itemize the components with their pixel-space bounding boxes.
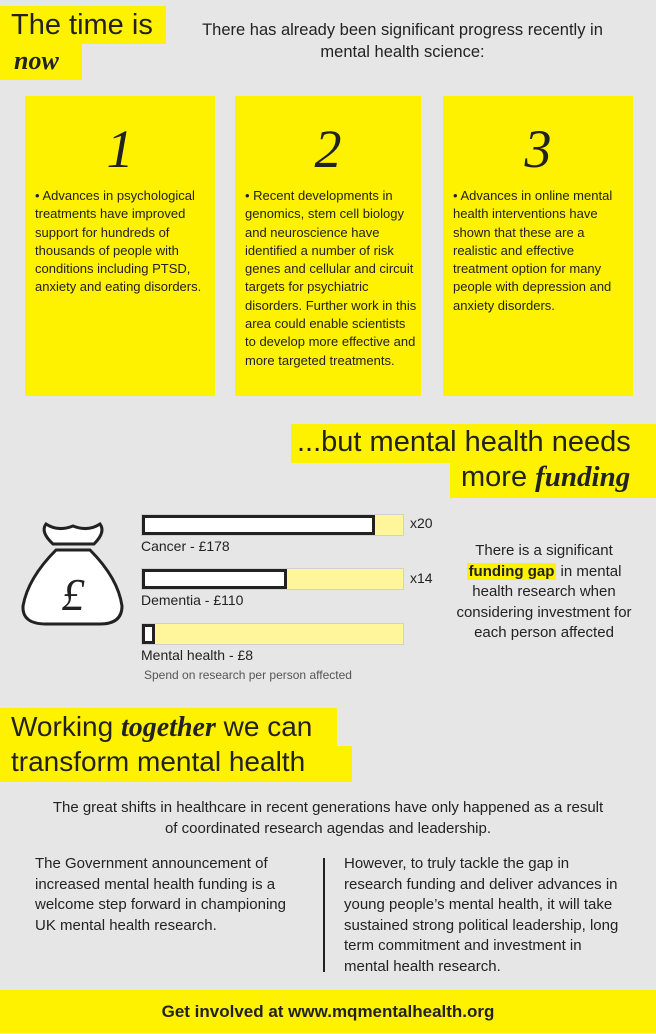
- heading: needs more funding: ...but mental health needs: [297, 426, 631, 458]
- text: left column: The Government announcement of increased mental health funding is a welcome step forward in championing UK mental health research.: [35, 855, 286, 934]
- heading: working together: transform mental health: [11, 746, 305, 777]
- bar chart: Spend on research per person affected: [144, 668, 352, 682]
- panel: 2: [235, 96, 421, 396]
- panel: 2: • Recent developments in genomics, stem cell biology and neuroscience have identified a number of risk genes and cellular and circuit targets for psychiatric disorders. Further work in this area could enable scientists to develop more effective and more targeted treatments.: [245, 188, 416, 368]
- bar chart: x14: [410, 570, 433, 586]
- panel: 3: 3: [524, 119, 552, 179]
- panel: 3: • Advances in online mental health interventions have shown that these are a realistic and effective treatment option for many people with depression and anxiety disorders.: [453, 188, 612, 313]
- text: right column: However, to truly tackle the gap in research funding and deliver advances in young people’s mental health, it will take sustained strong political leadership, long term commitment and investment in mental health research.: [344, 855, 618, 975]
- panel: 2: 2: [314, 119, 342, 179]
- bar chart: Dementia - £110: [141, 592, 243, 608]
- footer: Get involved at www.mqmentalhealth.org: [162, 1002, 494, 1021]
- title: the time is now: [0, 6, 166, 80]
- panel: 1: 1: [106, 119, 134, 179]
- bar chart: Cancer - £178: [141, 538, 230, 554]
- text: great shifts: The great shifts in healthcare in recent generations have only happened as a result: [53, 799, 603, 816]
- footer: [0, 990, 656, 1033]
- icon: money bag: [21, 522, 124, 626]
- callout: funding gap: There is a significant funding gap in mental health research when considering investment for each person affected: [456, 542, 632, 641]
- bar chart: [141, 514, 433, 682]
- text: great shifts: of coordinated research agendas and leadership.: [165, 820, 491, 837]
- text: great shifts: [53, 799, 604, 837]
- bar chart: Mental health - £8: [141, 647, 253, 663]
- heading: working together: Working together we can: [11, 711, 312, 743]
- title: the time is now: The time is: [11, 9, 153, 41]
- heading: needs more funding: more funding: [461, 461, 630, 493]
- heading: needs more funding: [291, 424, 656, 498]
- panel: 1: [25, 96, 215, 396]
- heading: working together: [0, 708, 352, 782]
- title: the time is now: now: [14, 46, 59, 75]
- icon: money bag: £: [62, 569, 86, 620]
- panel: 1: • Advances in psychological treatments have improved support for hundreds of thousands of people with conditions including PTSD, anxiety and eating disorders.: [35, 188, 201, 294]
- panel: 3: [443, 96, 633, 396]
- intro text: There has already been significant progress recently in mental health science:: [202, 21, 603, 61]
- bar chart: x20: [410, 515, 433, 531]
